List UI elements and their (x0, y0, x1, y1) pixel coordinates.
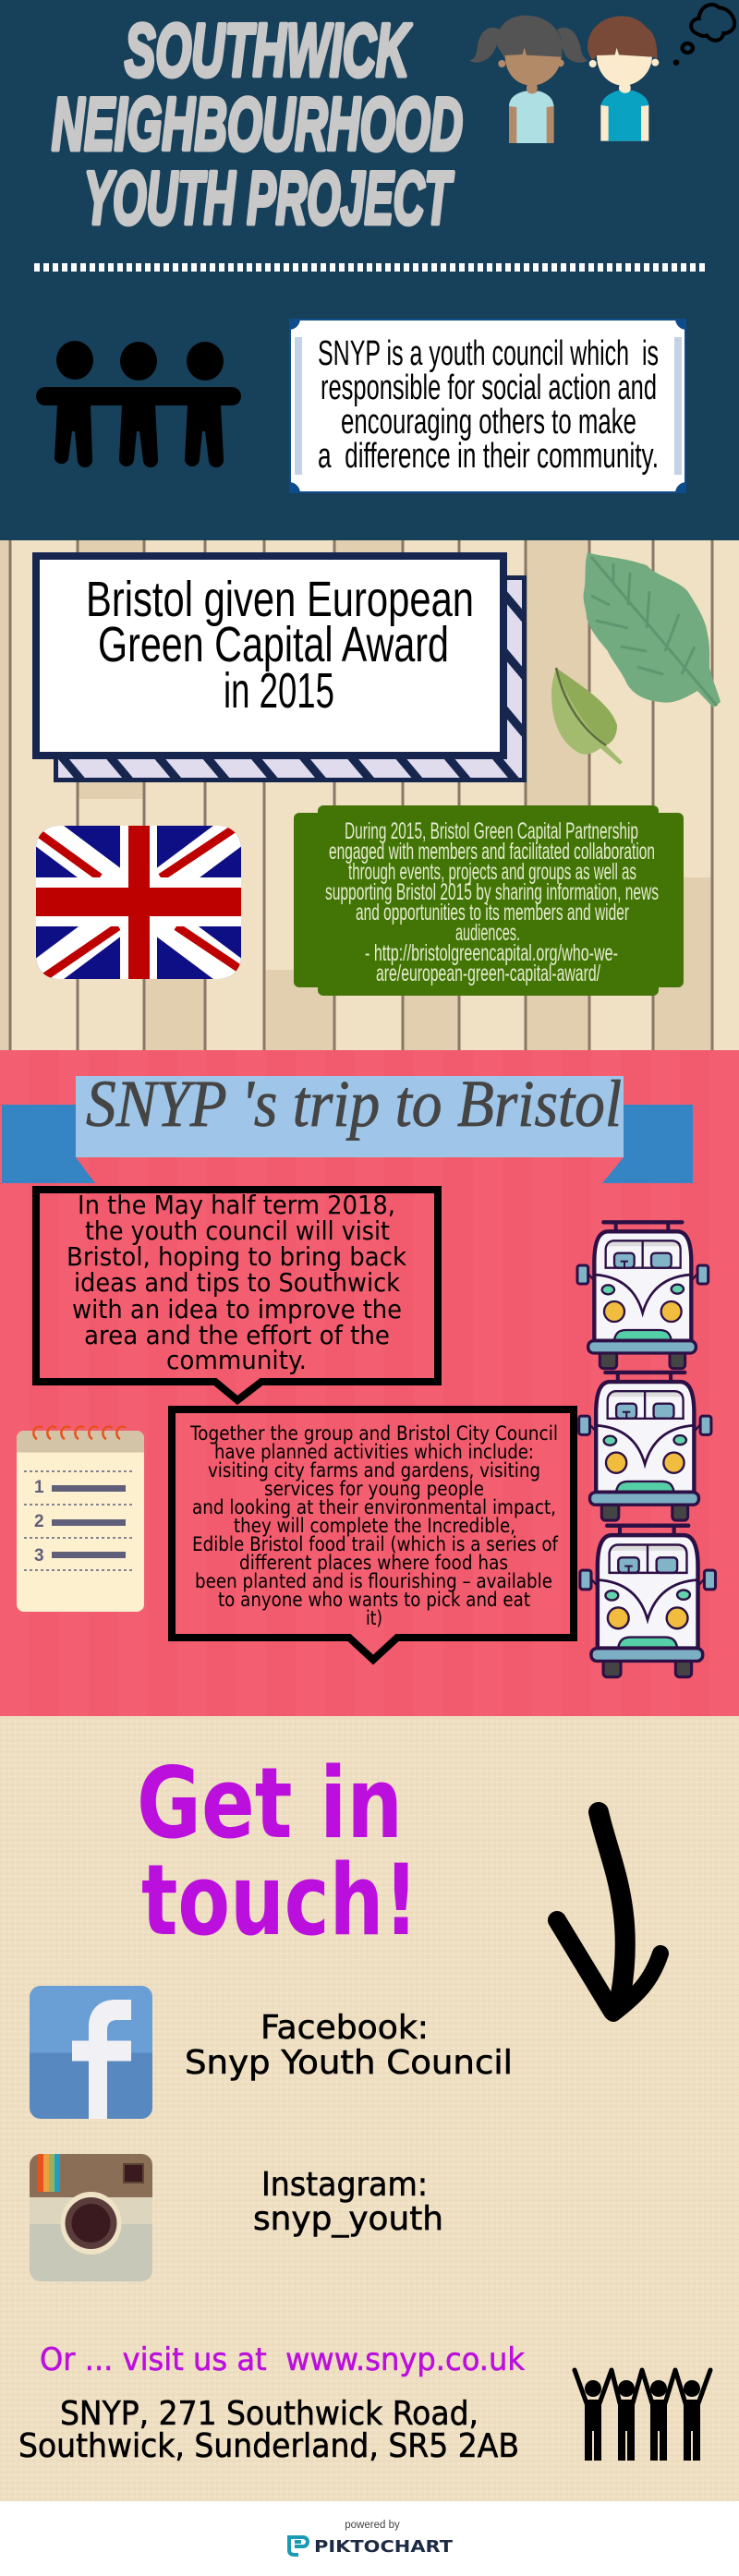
callout: May half term visit: In the May half term 2018, (78, 1190, 395, 1220)
icon: four people with raised arms (575, 2370, 710, 2461)
callout: May half term visit: ideas and tips to Southwick (74, 1267, 401, 1298)
callout: May half term visit: area and the effort of the (84, 1320, 390, 1350)
icon: two children with thought bubble (469, 5, 734, 143)
callout: May half term visit (36, 1190, 438, 1400)
text: Facebook (185, 2009, 513, 2082)
panel: header (0, 0, 739, 540)
heading box: Bristol given European Green Capital Award: in 2015 (224, 663, 334, 719)
heading box: Bristol given European Green Capital Award: Bristol given European (86, 572, 474, 627)
title: YOUTH PROJECT (84, 157, 454, 240)
callout: May half term visit: community. (166, 1345, 307, 1375)
icon: numbered notepad (17, 1427, 144, 1612)
callout: May half term visit: Bristol, hoping to bring back (67, 1241, 407, 1272)
text: Piktochart wordmark: PIKTOCHART (314, 2537, 454, 2557)
text: powered by: powered by (345, 2520, 400, 2531)
icon: camper van 1 (577, 1222, 709, 1369)
callout: planned activities: and looking at their environmental impact, (192, 1496, 556, 1518)
icon: Piktochart logo (289, 2537, 308, 2555)
callout: May half term visit: with an idea to improve the (72, 1294, 402, 1324)
icon: small leaf (551, 668, 623, 765)
text: address: Southwick, Sunderland, SR5 2AB (18, 2427, 519, 2465)
text box: Bristol Green Capital Partnership (294, 805, 684, 996)
heading box: Bristol given European Green Capital Award: Green Capital Award (98, 617, 449, 672)
footer (0, 2501, 739, 2576)
icon: camper van 3 (580, 1526, 715, 1677)
text box: Bristol Green Capital Partnership: audiences. (455, 920, 520, 946)
callout: May half term visit: the youth council will visit (85, 1215, 390, 1246)
title (52, 9, 463, 240)
text: Instagram (253, 2166, 443, 2238)
text: Facebook: Facebook: (260, 2009, 429, 2047)
text: Instagram: Instagram: (261, 2166, 428, 2204)
banner heading (2, 1067, 693, 1183)
icon: numbered notepad: 2 (34, 1512, 44, 1531)
text: address (18, 2395, 519, 2465)
panel: get in touch (0, 1716, 739, 2501)
icon: hand-drawn arrow (557, 1812, 660, 2014)
title: SOUTHWICK (125, 9, 412, 92)
panel: SNYP's trip to Bristol (0, 1050, 739, 1716)
callout: planned activities: Together the group and Bristol City Council (189, 1422, 558, 1445)
icon: three linked people (36, 341, 241, 467)
text: website: Or ... visit us at www.snyp.co.uk (40, 2341, 525, 2378)
heading box: Bristol given European Green Capital Award (36, 556, 525, 780)
text box: Bristol Green Capital Partnership: are/european-green-capital-award/ (376, 961, 600, 986)
icon: large leaf (584, 552, 721, 707)
callout: planned activities (172, 1409, 574, 1660)
icon: numbered notepad: 3 (34, 1546, 44, 1566)
banner heading: SNYP 's trip to Bristol (86, 1067, 622, 1141)
title: NEIGHBOURHOOD (52, 83, 463, 166)
icon: Facebook (30, 1986, 152, 2119)
heading: Get in touch: Get in (137, 1747, 403, 1860)
callout: planned activities: to anyone who wants to pick and eat (218, 1589, 530, 1611)
heading: Get in touch (137, 1747, 418, 1957)
callout: planned activities: Edible Bristol food trail (which is a series of (192, 1533, 559, 1555)
text: address: SNYP, 271 Southwick Road, (60, 2395, 479, 2433)
icon: camper van 2 (579, 1373, 711, 1520)
callout: planned activities: it) (366, 1607, 382, 1629)
text box: about SNYP (289, 319, 686, 493)
callout: planned activities: visiting city farms and gardens, visiting (208, 1459, 540, 1482)
callout: planned activities: different places where food has (239, 1552, 508, 1574)
callout: planned activities: been planted and is flourishing – available (195, 1570, 552, 1592)
callout: planned activities: services for young people (264, 1478, 484, 1500)
icon: Union Jack flag (36, 826, 241, 979)
callout: planned activities: they will complete the Incredible, (234, 1515, 515, 1537)
callout: planned activities: have planned activities which include: (214, 1441, 534, 1463)
text: Instagram: snyp_youth (253, 2200, 443, 2238)
text: Facebook: Snyp Youth Council (185, 2044, 513, 2082)
panel: Bristol award on wood background (0, 540, 739, 1050)
heading: Get in touch: touch! (141, 1844, 418, 1957)
icon: numbered notepad: 1 (34, 1478, 44, 1497)
icon: Instagram (30, 2154, 152, 2281)
